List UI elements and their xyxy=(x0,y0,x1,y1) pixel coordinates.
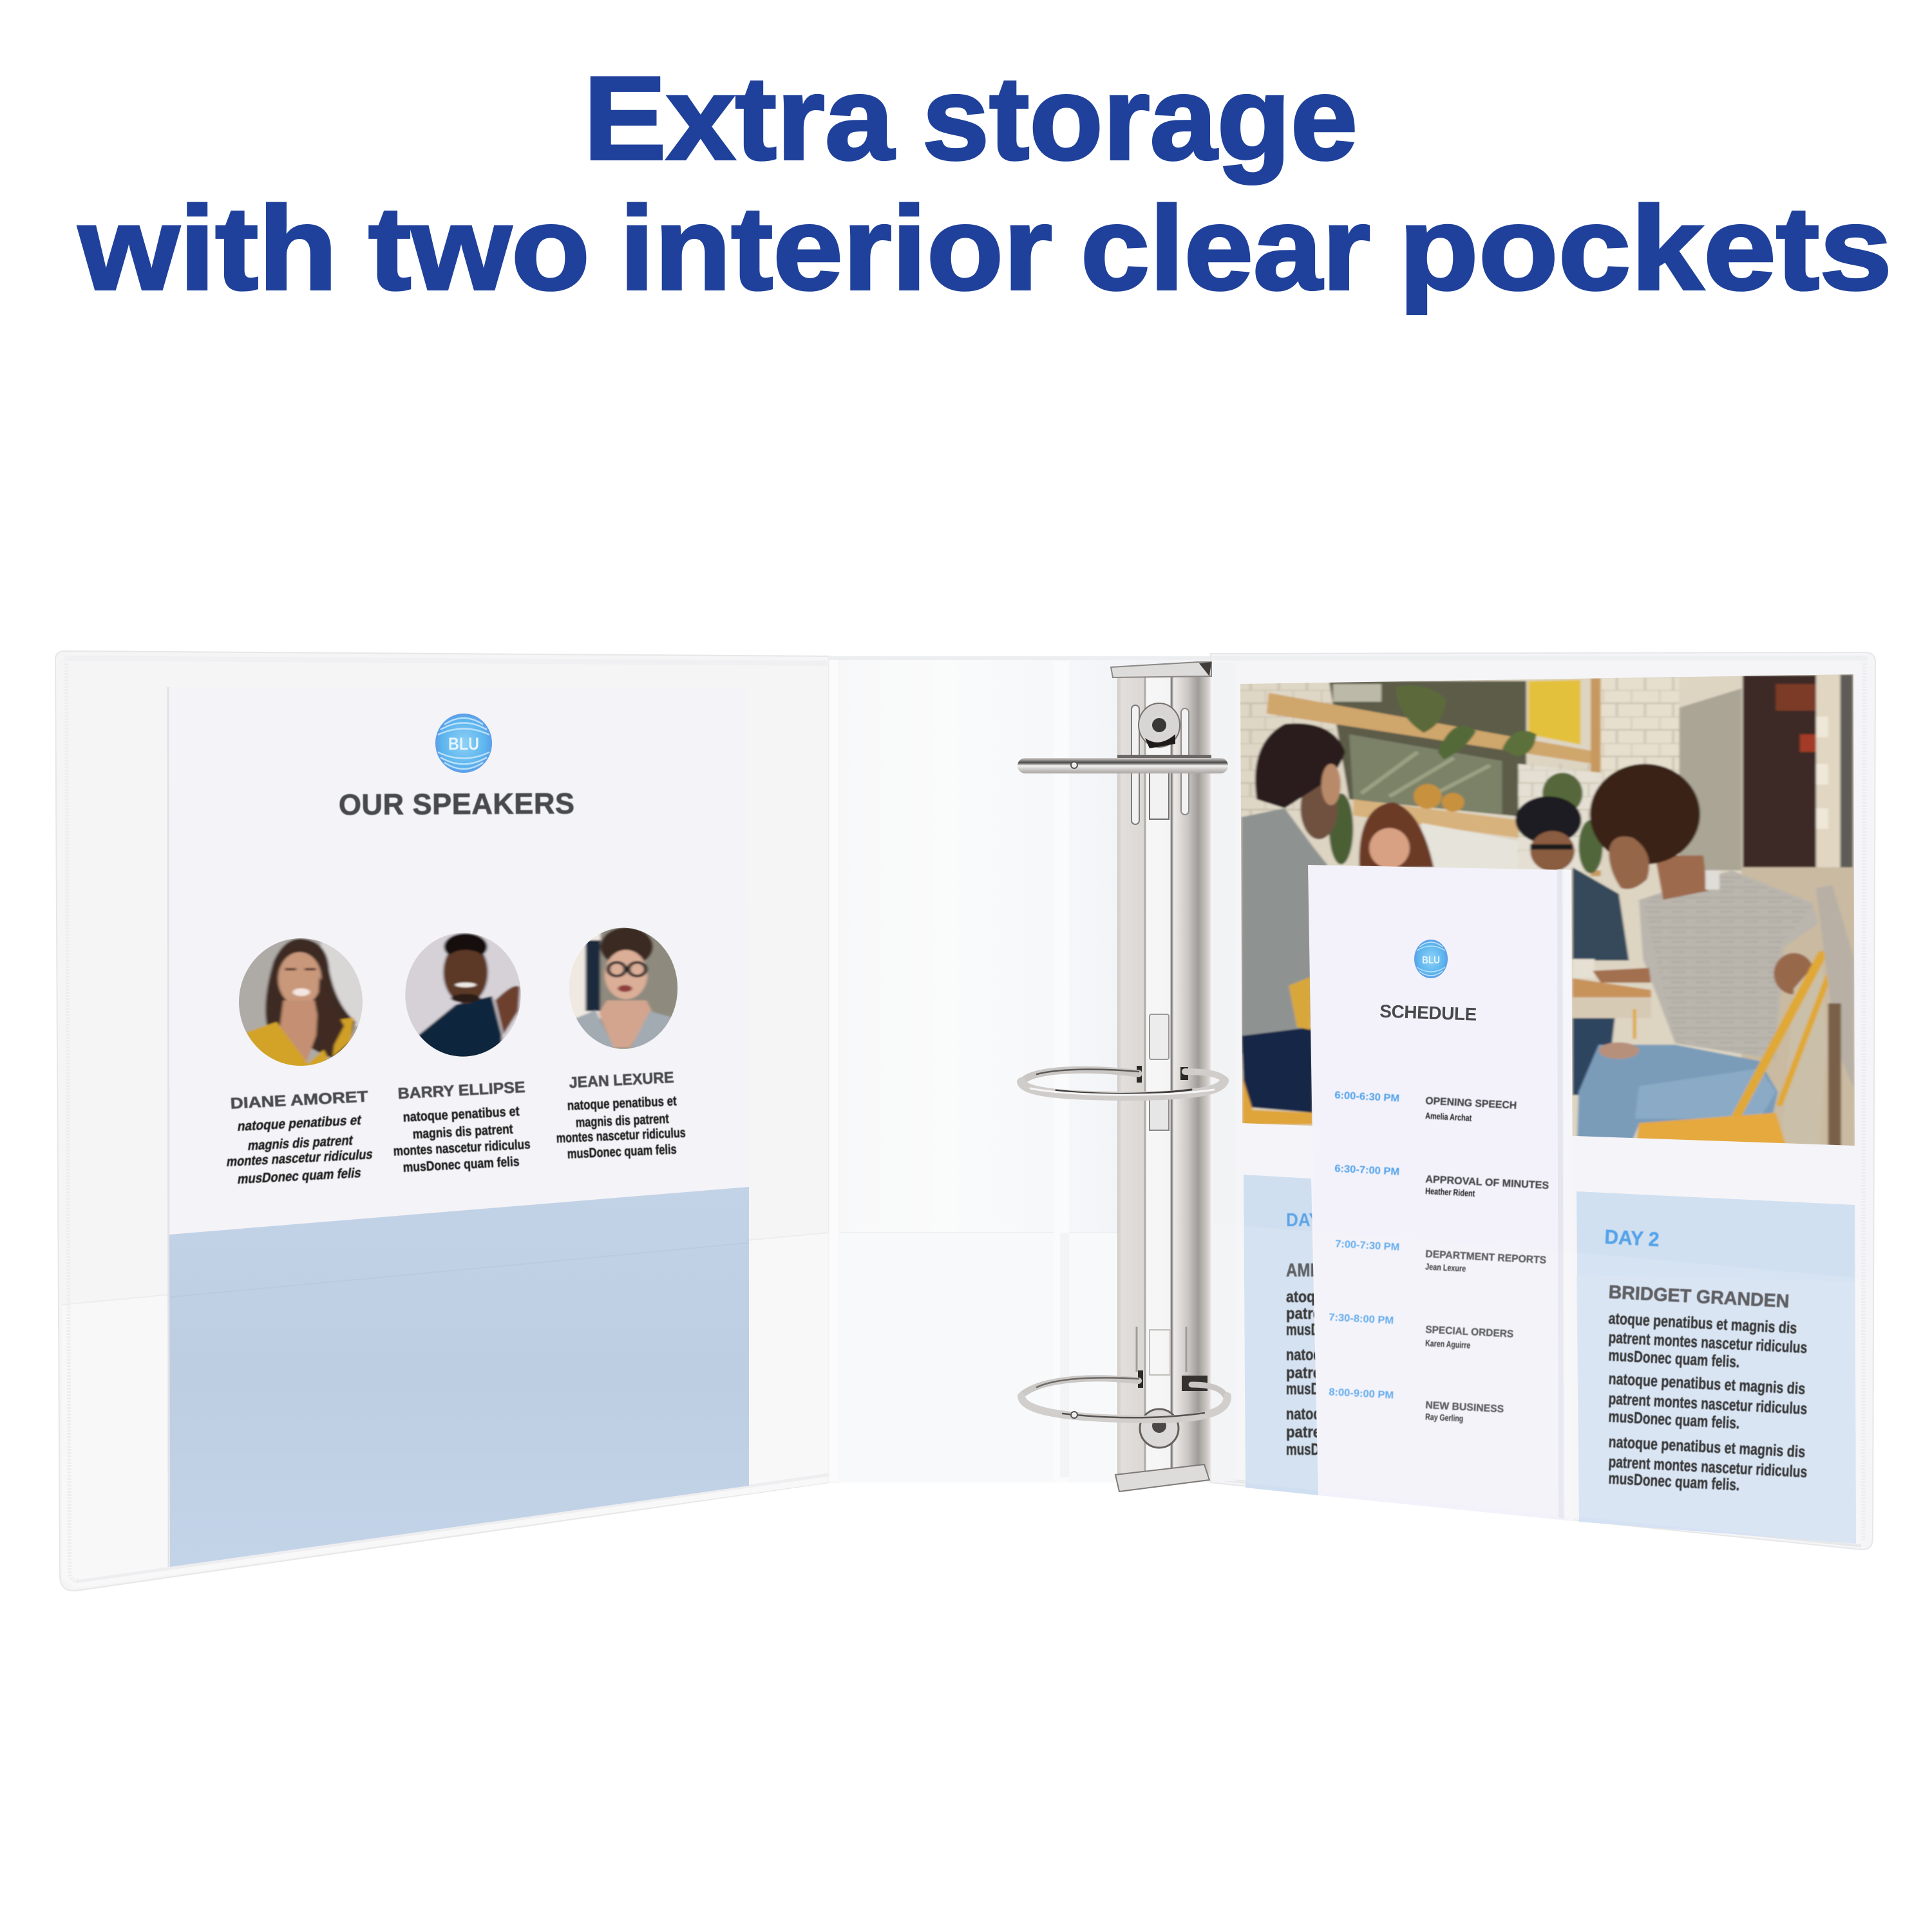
speaker: Barry Ellipse: musDonec quam felis xyxy=(402,1154,520,1175)
title: clear xyxy=(1081,182,1370,314)
clipped text of day 1 xyxy=(1286,1210,1348,1459)
title: Extra xyxy=(583,52,895,184)
day 2 text block: natoque penatibus et magnis dis xyxy=(1608,1370,1806,1398)
icon: BLU logo: BLU xyxy=(448,734,479,753)
schedule rows: 8:00-9:00 PM xyxy=(1329,1387,1394,1401)
plants xyxy=(1396,685,1446,733)
schedule rows: 7:00-7:30 PM xyxy=(1335,1238,1400,1253)
speaker: Barry Ellipse: montes nascetur ridiculus xyxy=(393,1137,531,1159)
heading: our speakers: OUR SPEAKERS xyxy=(339,787,574,821)
speaker: Barry Ellipse: BARRY ELLIPSE xyxy=(397,1079,526,1103)
infographic canvas xyxy=(55,76,1888,1591)
title xyxy=(78,52,1892,314)
title: storage xyxy=(922,52,1358,184)
day 2 text block: DAY 2 xyxy=(1604,1226,1660,1251)
clipped text of day 1: natoque xyxy=(1286,1346,1336,1364)
panel: binder spine xyxy=(829,656,1222,1482)
day 2 text block: patrent montes nascetur ridiculus xyxy=(1608,1453,1808,1481)
schedule rows: Heather Rident xyxy=(1425,1186,1475,1198)
portrait: Jean xyxy=(567,927,679,1052)
clipped text of day 1: musDonec xyxy=(1286,1321,1348,1339)
schedule rows: 6:00-6:30 PM xyxy=(1334,1090,1400,1104)
speaker: Diane Amoret: natoque penatibus et xyxy=(236,1113,363,1134)
day 2 text block: musDonec quam felis. xyxy=(1608,1470,1740,1494)
speaker: Diane Amoret xyxy=(225,1088,374,1187)
speaker: Diane Amoret: musDonec quam felis xyxy=(236,1166,363,1187)
schedule rows: DEPARTMENT REPORTS xyxy=(1425,1249,1547,1266)
woman with afro xyxy=(1639,870,1818,1059)
schedule rows: OPENING SPEECH xyxy=(1425,1095,1517,1112)
title: interior xyxy=(620,182,1052,314)
slot details and screw on the plate xyxy=(1132,703,1189,1448)
schedule rows: 7:30-8:00 PM xyxy=(1329,1312,1394,1327)
day 2 text block: musDonec quam felis. xyxy=(1608,1408,1740,1432)
day 2 text block: atoque penatibus et magnis dis xyxy=(1608,1309,1797,1338)
photo: cafe scene xyxy=(1236,663,1864,1154)
top bracket xyxy=(1111,662,1211,677)
blue panel: day 1 xyxy=(1244,1175,1318,1495)
speaker: Jean Lexure: JEAN LEXURE xyxy=(569,1069,674,1092)
day 2 text block: natoque penatibus et magnis dis xyxy=(1608,1433,1806,1461)
speaker: Jean Lexure: montes nascetur ridiculus xyxy=(556,1126,686,1146)
schedule rows: 6:30-7:00 PM xyxy=(1334,1163,1400,1178)
speaker bios xyxy=(225,1069,686,1187)
speaker: Diane Amoret: DIANE AMORET xyxy=(230,1088,369,1113)
bottom bracket xyxy=(1115,1464,1209,1492)
man with hat xyxy=(1515,797,1582,844)
blue band of the speakers sheet xyxy=(169,1187,749,1567)
panel: left cover with clear pocket xyxy=(55,651,829,1591)
panel: right cover with clear pocket xyxy=(1211,652,1875,1549)
icon: BLU logo small: BLU xyxy=(1422,955,1440,966)
speaker: Barry Ellipse: natoque penatibus et xyxy=(402,1104,520,1125)
chair xyxy=(1780,956,1826,1154)
heading: schedule: SCHEDULE xyxy=(1379,1001,1477,1025)
schedule rows: APPROVAL OF MINUTES xyxy=(1425,1174,1549,1191)
title: with xyxy=(78,182,337,314)
title: two xyxy=(368,182,590,314)
speaker: Jean Lexure: musDonec quam felis xyxy=(567,1142,677,1162)
schedule rows: Ray Gerling xyxy=(1425,1412,1464,1424)
title: pockets xyxy=(1399,182,1892,314)
day 2 text block xyxy=(1604,1226,1808,1494)
metal ring mechanism xyxy=(1018,662,1228,1492)
speaker: Jean Lexure: magnis dis patrent xyxy=(575,1112,669,1130)
schedule rows: Amelia Archat xyxy=(1425,1110,1472,1123)
blue panel: day 2 xyxy=(1577,1191,1856,1544)
icon: BLU logo small xyxy=(1414,940,1448,978)
clipped text of day 1: musDonec xyxy=(1286,1380,1348,1398)
clipped text of day 1: DAY 1 xyxy=(1286,1210,1334,1231)
speaker: Jean Lexure xyxy=(556,1069,686,1162)
clipped text of day 1: atoque xyxy=(1286,1288,1331,1306)
day 2 text block: patrent montes nascetur ridiculus xyxy=(1608,1329,1808,1357)
clipped text of day 1: patrent xyxy=(1286,1364,1335,1382)
schedule rows: SPECIAL ORDERS xyxy=(1425,1324,1514,1340)
speaker: Diane Amoret: montes nascetur ridiculus xyxy=(225,1147,374,1170)
ring 2 xyxy=(1021,1066,1226,1096)
icon: portraits of the three speakers xyxy=(236,927,679,1071)
table xyxy=(1573,978,1651,998)
clipped text of day 1: natoque xyxy=(1286,1405,1336,1423)
speaker: Barry Ellipse xyxy=(393,1079,531,1175)
ring 1 xyxy=(1018,755,1228,773)
schedule rows xyxy=(1329,1090,1549,1424)
schedule rows: NEW BUSINESS xyxy=(1425,1400,1504,1415)
jeans xyxy=(1577,1045,1778,1154)
man left xyxy=(1242,808,1327,1054)
woman centre xyxy=(1359,802,1434,867)
day 2 text block: patrent montes nascetur ridiculus xyxy=(1608,1390,1808,1418)
panel: OUR SPEAKERS sheet xyxy=(168,687,749,1567)
speaker: Jean Lexure: natoque penatibus et xyxy=(567,1094,677,1113)
clipped text of day 1: patrent xyxy=(1286,1305,1335,1323)
metal plate xyxy=(1117,670,1211,1475)
day 2 text block: BRIDGET GRANDEN xyxy=(1608,1282,1790,1312)
speaker: Barry Ellipse: magnis dis patrent xyxy=(412,1122,513,1142)
schedule rows: Jean Lexure xyxy=(1425,1261,1466,1274)
clipped text of day 1: musDonec xyxy=(1286,1441,1348,1459)
icon: BLU logo xyxy=(435,714,492,773)
clipped text of day 1: patrent xyxy=(1286,1423,1335,1441)
clipped text of day 1: AMELIA xyxy=(1286,1260,1345,1281)
portrait: Diane xyxy=(239,938,363,1066)
day 2 text block: musDonec quam felis. xyxy=(1608,1347,1740,1371)
panel: SCHEDULE card in clear pocket xyxy=(1308,865,1574,1521)
ring 3 xyxy=(1021,1370,1227,1419)
panel: event sheet in right pocket xyxy=(1236,663,1864,1544)
clear pocket over right sheet xyxy=(1214,1224,1862,1546)
portrait: Barry xyxy=(403,932,525,1061)
schedule rows: Karen Aguirre xyxy=(1425,1338,1471,1350)
speaker: Diane Amoret: magnis dis patrent xyxy=(247,1133,354,1153)
open binder xyxy=(55,651,1875,1591)
